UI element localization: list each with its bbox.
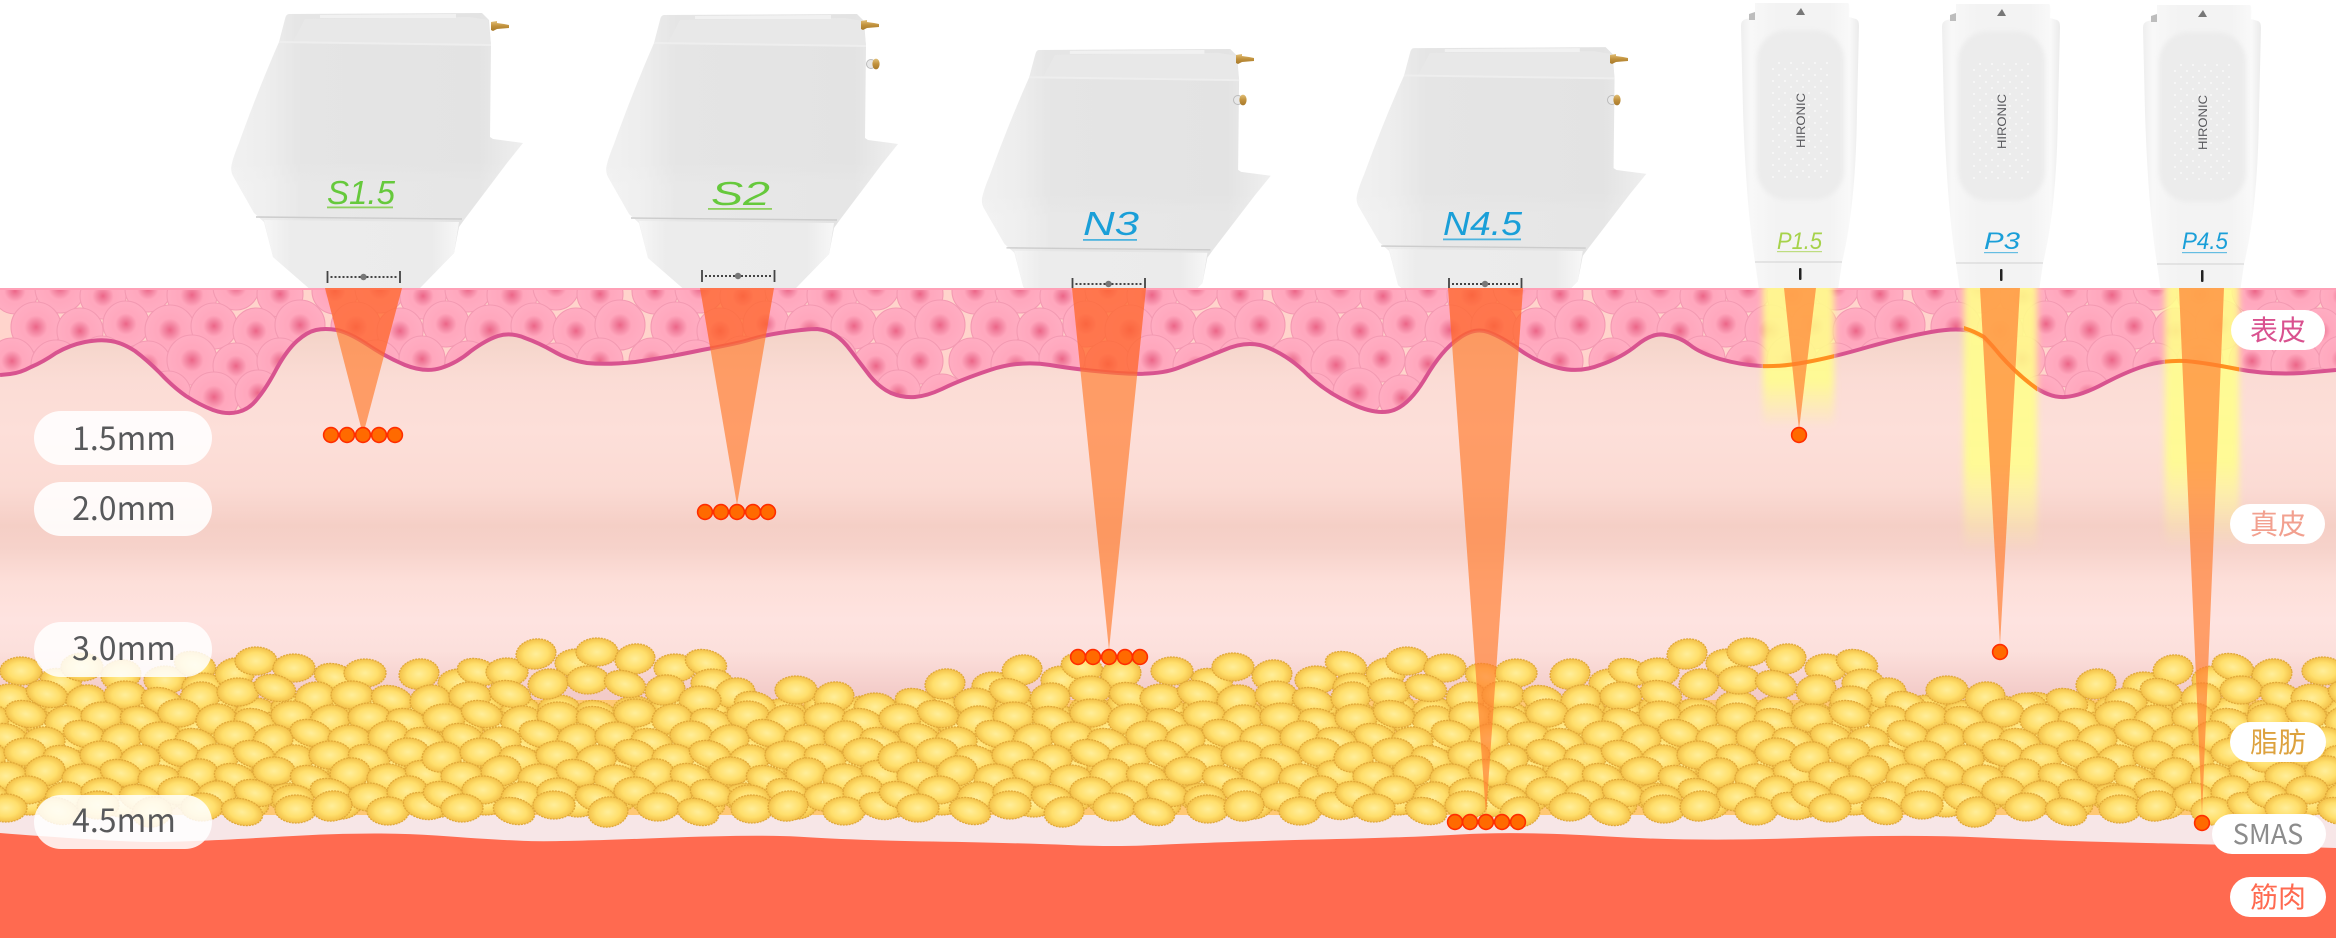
focal points N4.5: [1448, 815, 1525, 829]
focal point P1.5: [1792, 428, 1806, 442]
depth label 1.5mm: 1.5mm: [72, 414, 176, 460]
focus beam P1.5: [1784, 288, 1816, 430]
depth label 3.0mm: 3.0mm: [72, 624, 176, 670]
model label P3: P3: [1984, 228, 2021, 255]
layer tag muscle: 筋肉: [2250, 876, 2306, 916]
depth label 2.0mm: [34, 482, 212, 536]
layer tag dermis: 真皮: [2250, 503, 2306, 543]
model label S1.5: S1.5: [327, 174, 396, 211]
pen handpiece P1.5: [1741, 3, 1859, 290]
focus beam N3: [1072, 288, 1146, 650]
model label P4.5: P4.5: [2182, 228, 2229, 255]
layer tag muscle: [2230, 876, 2326, 917]
focal points S1.5: [324, 428, 402, 442]
focus beam S2: [700, 288, 774, 505]
model label P1.5: P1.5: [1777, 228, 1823, 255]
epidermis boundary line: [0, 329, 2336, 413]
layer tag dermis: [2230, 503, 2325, 544]
depth label 2.0mm: 2.0mm: [72, 484, 176, 530]
cartridge handpiece N3: [982, 49, 1271, 319]
layer tag SMAS: [2212, 813, 2326, 854]
focal points S2: [698, 505, 775, 519]
layer tag epidermis: 表皮: [2250, 309, 2306, 349]
focus beam S1.5: [325, 288, 402, 435]
layer tag fat: 脂肪: [2250, 721, 2306, 761]
model label N4.5: N4.5: [1443, 205, 1523, 242]
depth label 4.5mm: [34, 795, 212, 849]
pen handpiece P3: [1942, 4, 2060, 291]
SMAS layer: [0, 810, 2336, 855]
layer tag SMAS: SMAS: [2233, 813, 2303, 852]
depth label 1.5mm: [34, 411, 212, 465]
focus beam N4.5: [1448, 288, 1523, 815]
cartridge handpiece N4.5: [1356, 47, 1646, 317]
boundary line through glow: [1763, 326, 2239, 392]
fat layer: [0, 636, 2336, 830]
yellow thermal glow for pen cartridges: [1763, 280, 2239, 552]
depth label 4.5mm: 4.5mm: [72, 796, 176, 842]
focal point P3: [1993, 645, 2007, 659]
pen handpiece P4.5: [2143, 5, 2261, 292]
model label S2: [708, 175, 772, 212]
focus beam P3: [1980, 288, 2020, 645]
depth label 3.0mm: [34, 622, 212, 677]
focus beam P4.5: [2179, 288, 2224, 815]
muscle layer: [0, 833, 2336, 938]
epidermis cells: [0, 288, 2336, 412]
layer tag epidermis: [2231, 309, 2325, 350]
focal point P4.5: [2195, 816, 2209, 830]
cartridge handpiece S2: [606, 14, 898, 291]
model label N3: N3: [1083, 205, 1140, 242]
model label S2: S2: [711, 175, 770, 212]
dermis layer: [0, 288, 2336, 728]
layer tag fat: [2230, 721, 2326, 762]
cartridge handpiece S1.5: [231, 13, 523, 290]
beam overlay within epidermis: [325, 288, 1523, 374]
focal points N3: [1071, 650, 1147, 664]
